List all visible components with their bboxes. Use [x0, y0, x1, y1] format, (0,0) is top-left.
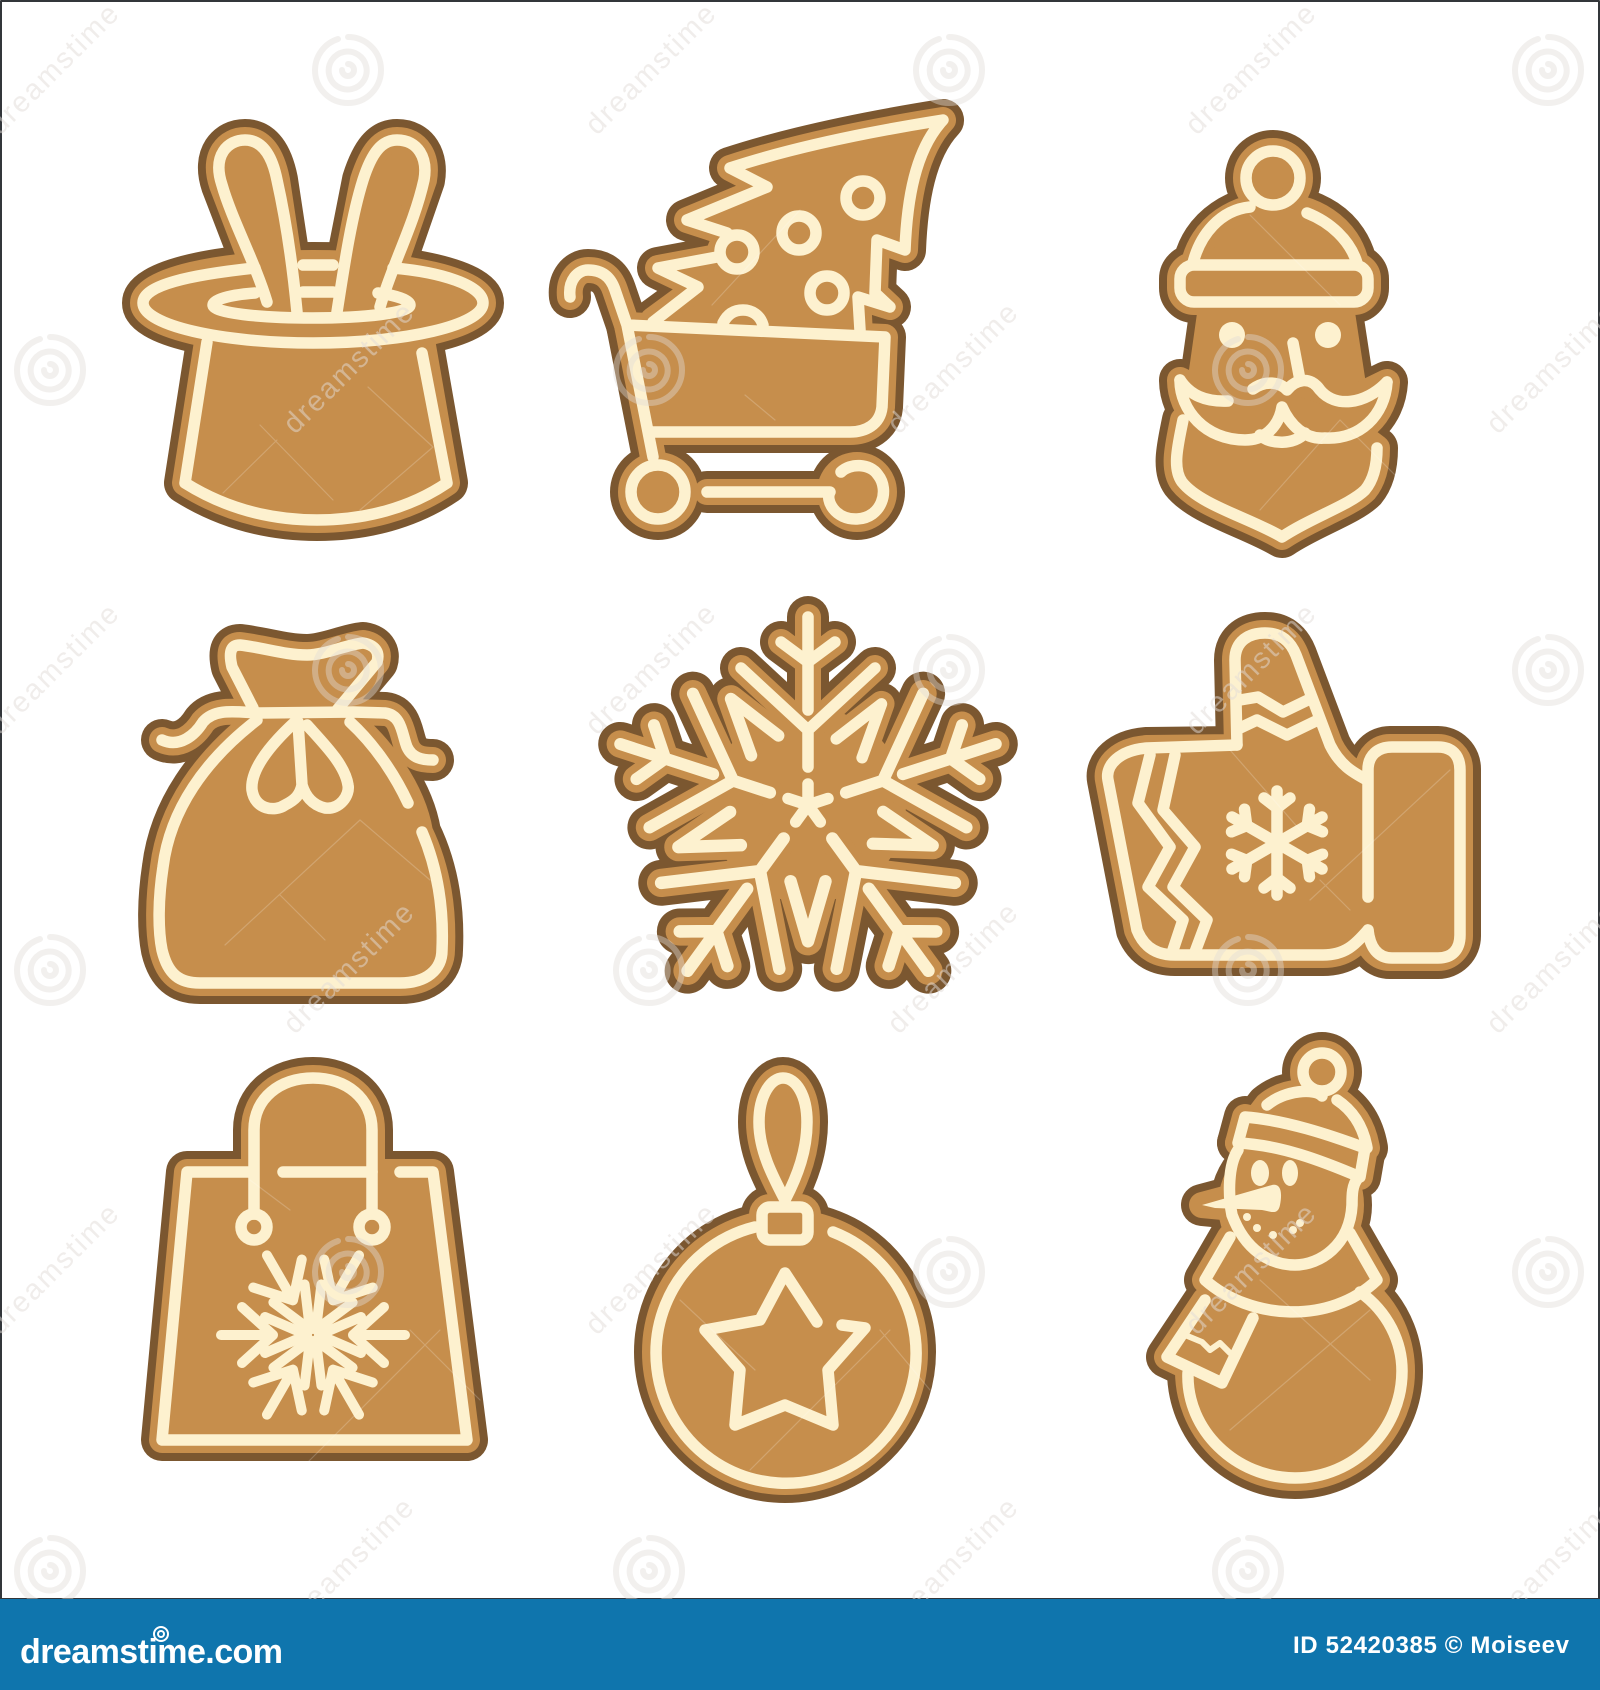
watermark: fine diagonal lines — [223, 210, 1450, 1470]
icon: thumbs-up mitten — [1108, 633, 1460, 958]
hat brim — [143, 268, 483, 343]
tree outline — [653, 120, 943, 330]
santa eyes — [1219, 322, 1341, 348]
sack body — [159, 720, 442, 983]
bag handle — [254, 1078, 372, 1214]
icon: santa sack — [159, 643, 442, 983]
watermark: dreamstime text: dreamstime — [277, 1492, 420, 1635]
mitten snowflake — [1225, 791, 1329, 895]
rabbit ears — [219, 140, 425, 312]
watermark: dreamstime text: dreamstime — [579, 1198, 722, 1341]
watermark: dreamstime text: dreamstime — [277, 897, 420, 1040]
handle rings — [241, 1214, 385, 1240]
icon: christmas bauble with star — [655, 1078, 916, 1483]
bag outline — [162, 1172, 467, 1440]
snowflake icing — [599, 617, 1024, 1026]
snowman body — [1188, 1292, 1402, 1478]
bow loops — [252, 722, 348, 809]
logo swirl — [154, 1627, 168, 1641]
watermark: dreamstime text: dreamstime — [881, 897, 1024, 1040]
sack tie — [162, 712, 433, 760]
star — [705, 1273, 865, 1425]
footer image id and author: ID 52420385 © Moiseev — [1293, 1632, 1570, 1659]
snowman scarf — [1167, 1233, 1377, 1383]
santa hat — [1180, 151, 1368, 302]
pompom and hat — [1238, 1053, 1367, 1177]
bauble loop — [759, 1078, 807, 1200]
watermark: dreamstime text: dreamstime — [881, 297, 1024, 440]
bag snowflake — [221, 1241, 405, 1429]
footer logo: dreamstime.com: dreamstime.com — [20, 1633, 283, 1671]
watermark: dreamstime text: dreamstime — [277, 297, 420, 440]
snowman eyes, nose and smile — [1202, 1160, 1304, 1239]
mitten zigzag stripes — [1138, 697, 1318, 952]
footer bar — [0, 1599, 1600, 1690]
tree baubles — [720, 181, 880, 325]
sack neck — [230, 643, 378, 710]
icon: rabbit in top hat — [143, 140, 483, 520]
icon: shopping cart with christmas tree — [570, 120, 943, 519]
mitten cuff — [1368, 747, 1460, 958]
watermark: dreamstime text: dreamstime — [579, 0, 722, 141]
icon: snowman — [1167, 1053, 1402, 1478]
icon: five-point snowflake — [599, 617, 1024, 1026]
icon: shopping bag with snowflake — [162, 1078, 467, 1440]
watermark: dreamstime text: dreamstime — [1179, 598, 1322, 741]
watermark: dreamstime text: dreamstime — [881, 1492, 1024, 1635]
hat body — [185, 342, 447, 520]
cart wheels — [631, 465, 883, 519]
santa moustache and nose — [1180, 343, 1387, 442]
watermark: dreamstime text: dreamstime — [1179, 1198, 1322, 1341]
snowman head — [1230, 1150, 1358, 1265]
watermark: dreamstime text: dreamstime — [579, 598, 722, 741]
santa beard — [1177, 420, 1377, 537]
icon: santa face — [1177, 151, 1387, 537]
watermark: dreamstime text: dreamstime — [1179, 0, 1322, 141]
mitten outline — [1108, 745, 1368, 955]
cart basket and handle — [570, 270, 885, 457]
mitten thumb — [1235, 633, 1367, 780]
bauble cap — [762, 1207, 808, 1240]
bauble ring — [656, 1227, 916, 1483]
